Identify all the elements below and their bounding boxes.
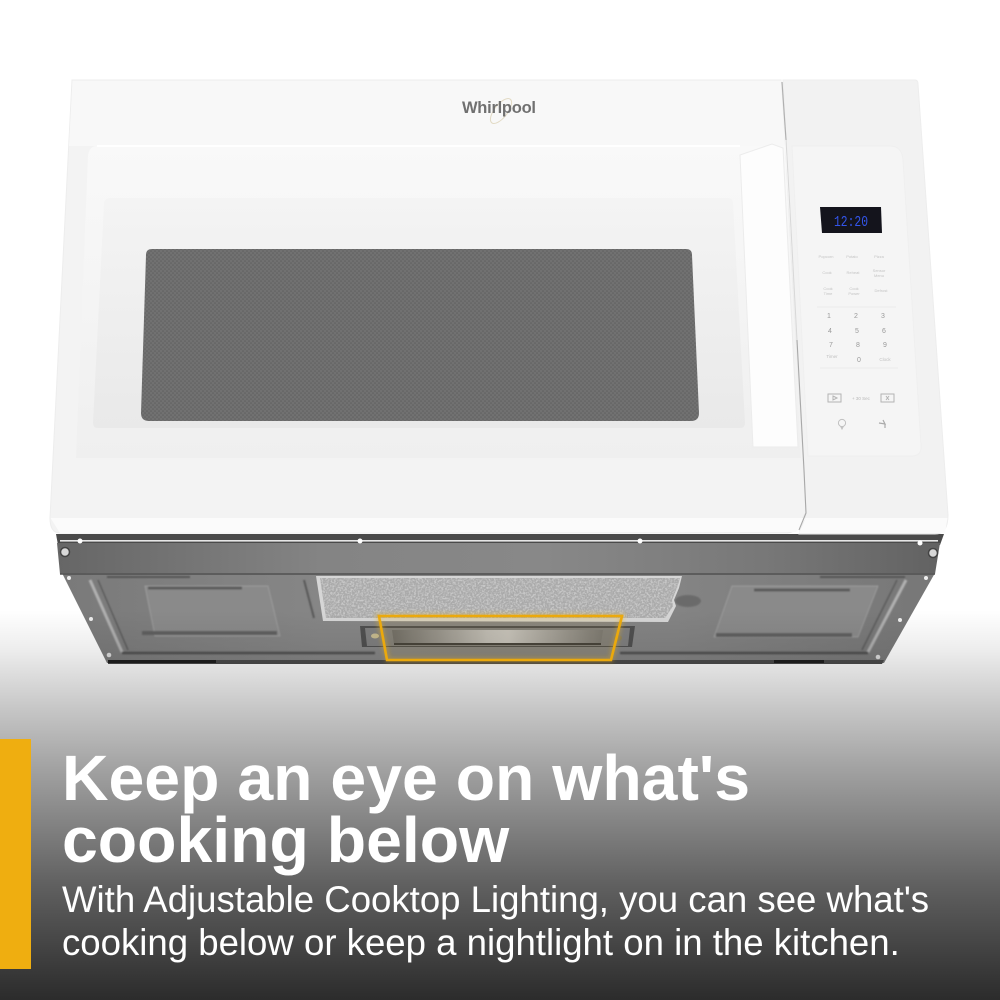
- icon: fan: [879, 420, 885, 428]
- left embossed panel: [90, 577, 375, 653]
- glass recess: [93, 198, 745, 428]
- dark gradient overlay: [0, 610, 1000, 1000]
- keypad labels: Potato: [846, 254, 859, 259]
- number keys: [827, 313, 887, 364]
- number keys: 7: [829, 342, 833, 349]
- heading: Keep an eye on what's: [62, 742, 750, 814]
- number keys: 0: [857, 357, 861, 364]
- keypad labels: Cook: [823, 286, 833, 291]
- column seam: [782, 82, 806, 530]
- number keys: 4: [828, 328, 832, 335]
- control panel: [792, 146, 921, 456]
- right control column: [783, 80, 948, 534]
- door handle: [740, 144, 798, 447]
- body text: With Adjustable Cooktop Lighting, you can see what's: [62, 879, 929, 920]
- keypad labels: Reheat: [847, 270, 860, 275]
- front lip: [50, 518, 806, 533]
- icon: light: [838, 419, 846, 429]
- number keys: 9: [883, 342, 887, 349]
- timer and clock labels: Timer: [826, 354, 838, 359]
- keypad labels: Power: [848, 291, 860, 296]
- plus 30 seconds label: + 30 Sec: [852, 396, 871, 401]
- keypad labels: Sensor: [873, 268, 886, 273]
- cooktop light housing: [360, 626, 635, 647]
- number keys: 2: [854, 313, 858, 320]
- number keys: 5: [855, 328, 859, 335]
- screws: [60, 538, 938, 659]
- start and cancel keys: [828, 394, 894, 402]
- number keys: 1: [827, 313, 831, 320]
- keypad labels: Cook: [849, 286, 859, 291]
- highlight box around the light: [379, 616, 622, 660]
- front metal band: [57, 543, 940, 574]
- keypad labels: [819, 254, 888, 296]
- keypad labels: Pizza: [874, 254, 885, 259]
- keypad labels: Popcorn: [819, 254, 833, 259]
- timer and clock labels: [826, 354, 891, 362]
- top highlight: [69, 80, 785, 146]
- bottom metal panel: [62, 573, 935, 663]
- microwave underside: [56, 534, 944, 664]
- keypad labels: Menu: [874, 273, 884, 278]
- right embossed panel: [620, 577, 906, 653]
- microwave body: [50, 80, 948, 534]
- logo: Whirlpool: [462, 99, 536, 117]
- yellow accent bar: [0, 739, 31, 969]
- dark seam below the body: [56, 534, 944, 545]
- logo: [462, 95, 536, 127]
- grease filter: [316, 576, 682, 622]
- heading: cooking below: [62, 804, 510, 876]
- window mesh: [141, 249, 699, 421]
- keypad labels: Cook: [822, 270, 832, 275]
- keypad labels: Defrost: [875, 288, 888, 293]
- display: [820, 207, 882, 233]
- door: [76, 146, 801, 458]
- number keys: 8: [856, 342, 860, 349]
- highlight box glow: [378, 616, 622, 660]
- timer and clock labels: Clock: [879, 357, 891, 362]
- body text: cooking below or keep a nightlight on in the kitchen.: [62, 922, 900, 963]
- display: 12:20: [834, 214, 868, 231]
- number keys: 3: [881, 313, 885, 320]
- number keys: 6: [882, 328, 886, 335]
- left front: [50, 80, 806, 533]
- keypad labels: Time: [824, 291, 833, 296]
